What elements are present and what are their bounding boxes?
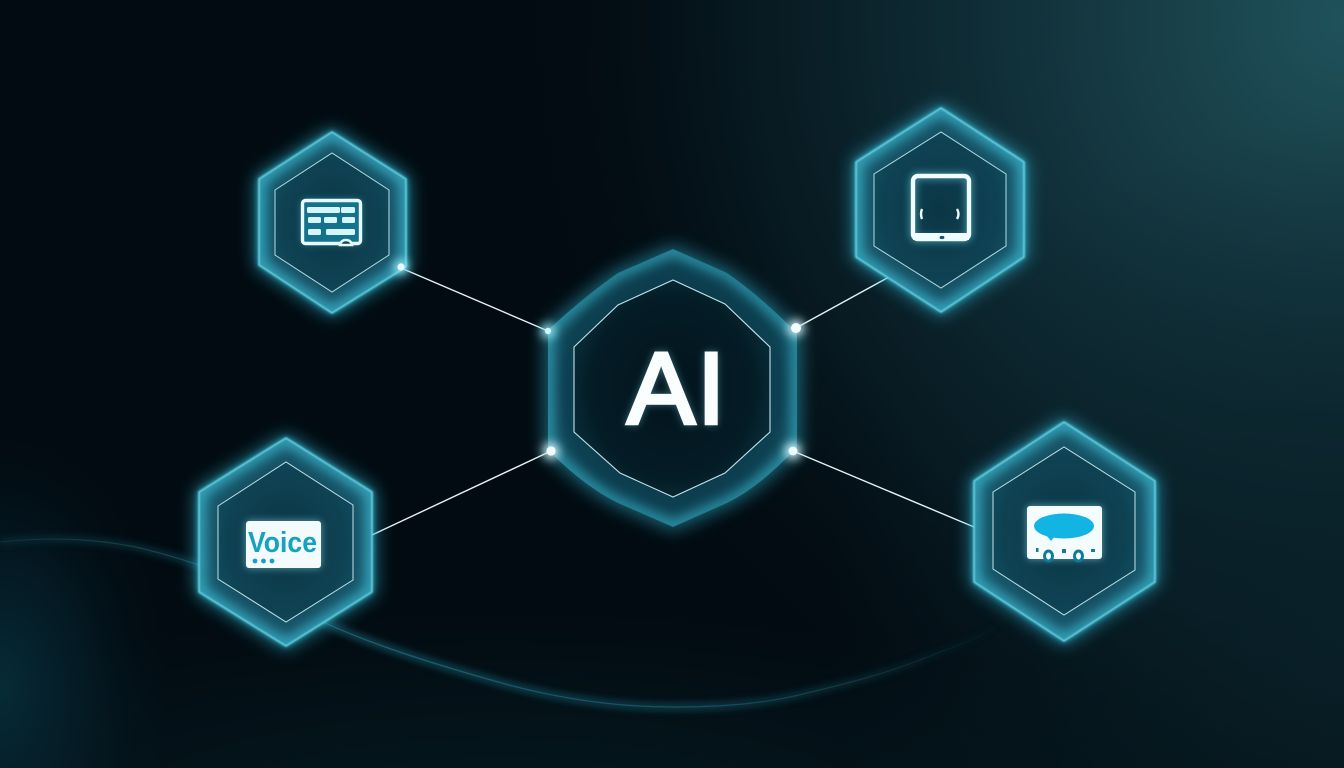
central AI hexagon — [548, 249, 797, 527]
node: voice icon hexagon — [199, 438, 372, 646]
connector nodes: glowing dots — [394, 260, 804, 459]
background wave arc — [0, 539, 996, 707]
connector: AI to table node — [401, 268, 548, 331]
icon: tablet — [913, 176, 969, 240]
connector: AI to chat node — [793, 451, 974, 527]
node: chat icon hexagon — [974, 422, 1155, 641]
AI label: I — [697, 332, 725, 446]
node: table icon hexagon — [259, 132, 406, 313]
icon: voice card: Voice — [248, 527, 317, 559]
AI label — [627, 332, 725, 446]
connector: AI to tablet node — [796, 277, 889, 328]
node: tablet icon hexagon — [856, 108, 1024, 312]
AI label: I — [697, 332, 725, 446]
connector: AI to voice node — [372, 451, 551, 535]
icon: voice card — [246, 521, 321, 568]
icon: table card — [302, 200, 361, 245]
icon: chat bubble card — [1027, 506, 1102, 561]
AI label: A — [627, 332, 695, 446]
AI label: A — [627, 332, 695, 446]
